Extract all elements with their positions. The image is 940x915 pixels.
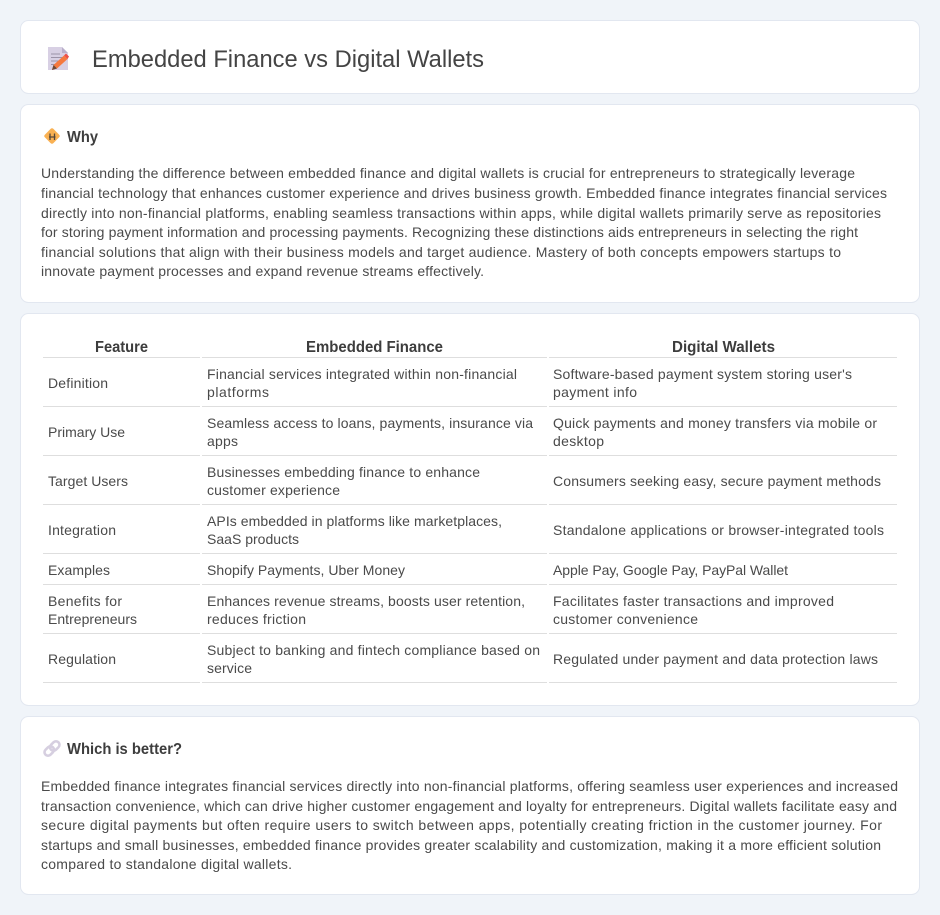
heading: why: Why bbox=[67, 129, 98, 146]
row: target users: Target Users bbox=[48, 473, 128, 489]
row: target users: Consumers seeking easy, secure payment methods bbox=[553, 473, 881, 489]
row: benefits for entrepreneurs: reduces friction bbox=[207, 611, 306, 627]
text block: which is better paragraph: secure digital payments but often require users to switch between apps, potentially creating friction in the customer journey. For bbox=[41, 817, 882, 833]
heading: which is better: Which is better? bbox=[67, 741, 182, 758]
table header row: Embedded Finance bbox=[306, 339, 443, 356]
text block: which is better paragraph: transaction convenience, which can drive higher customer engagement and loyalty for entrepreneurs. Digital wallets facilitate easy and bbox=[41, 798, 897, 814]
row: definition: Definition bbox=[48, 375, 108, 391]
row: integration: SaaS products bbox=[207, 531, 299, 547]
row: definition: platforms bbox=[207, 384, 269, 400]
row: benefits for entrepreneurs: Entrepreneurs bbox=[48, 611, 137, 627]
text block: why paragraph: innovate payment processes and expand revenue streams effectively. bbox=[41, 263, 484, 279]
row: regulation: Regulation bbox=[48, 651, 116, 667]
row: regulation: Subject to banking and fintech compliance based on bbox=[207, 642, 540, 658]
icon: orange diamond bbox=[44, 128, 60, 144]
table header row: Feature bbox=[95, 339, 148, 356]
text block: which is better paragraph bbox=[41, 778, 898, 872]
row: primary use: Seamless access to loans, payments, insurance via bbox=[207, 415, 533, 431]
text block: why paragraph: directly into non-financial platforms, enabling seamless transactions within apps, while digital wallets primarily serve as repositories bbox=[41, 205, 881, 221]
row: definition bbox=[48, 366, 852, 400]
row: benefits for entrepreneurs: Benefits for bbox=[48, 593, 122, 609]
row: primary use: Quick payments and money transfers via mobile or bbox=[553, 415, 877, 431]
row: target users bbox=[48, 464, 881, 498]
icon: document with pencil bbox=[48, 47, 69, 70]
row: examples: Apple Pay, Google Pay, PayPal Wallet bbox=[553, 562, 788, 578]
text block: why paragraph: financial solutions that align with their business models and target audience. Mastery of both concepts empowers startups to bbox=[41, 244, 841, 260]
text block: which is better paragraph: startups and small businesses, embedded finance provides greater scalability and customization, making it a more efficient solution bbox=[41, 837, 881, 853]
row: primary use: apps bbox=[207, 433, 238, 449]
row: primary use: desktop bbox=[553, 433, 604, 449]
row: integration: Standalone applications or browser-integrated tools bbox=[553, 522, 884, 538]
row: benefits for entrepreneurs: Enhances revenue streams, boosts user retention, bbox=[207, 593, 525, 609]
row: regulation bbox=[48, 642, 878, 676]
panel: why bbox=[20, 104, 920, 302]
row: definition: payment info bbox=[553, 384, 637, 400]
row: integration: APIs embedded in platforms like marketplaces, bbox=[207, 513, 502, 529]
text block: which is better paragraph: Embedded finance integrates financial services directly into non-financial platforms, offering seamless user experiences and increased bbox=[41, 778, 898, 794]
text block: which is better paragraph: compared to standalone digital wallets. bbox=[41, 856, 292, 872]
row: benefits for entrepreneurs: customer convenience bbox=[553, 611, 698, 627]
row: primary use: Primary Use bbox=[48, 424, 125, 440]
row: definition: Software-based payment system storing user's bbox=[553, 366, 852, 382]
row: benefits for entrepreneurs bbox=[48, 593, 834, 627]
text block: why paragraph bbox=[41, 165, 887, 279]
table header row: Digital Wallets bbox=[672, 339, 775, 356]
title: Embedded Finance vs Digital Wallets bbox=[92, 46, 484, 73]
row: integration: Integration bbox=[48, 522, 116, 538]
row: examples: Shopify Payments, Uber Money bbox=[207, 562, 405, 578]
panel: which is better bbox=[20, 716, 920, 894]
row: examples bbox=[48, 562, 788, 578]
row: regulation: service bbox=[207, 660, 252, 676]
text block: why paragraph: for storing payment information and processing payments. Recognizing these distinctions aids entrepreneurs in selecting the right bbox=[41, 224, 858, 240]
panel: comparison table bbox=[20, 314, 920, 706]
row: regulation: Regulated under payment and data protection laws bbox=[553, 651, 878, 667]
panel: title header bbox=[20, 20, 920, 94]
row: examples: Examples bbox=[48, 562, 110, 578]
row: benefits for entrepreneurs: Facilitates faster transactions and improved bbox=[553, 593, 834, 609]
table header row bbox=[95, 339, 775, 356]
row: target users: Businesses embedding finance to enhance bbox=[207, 464, 480, 480]
text block: why paragraph: Understanding the difference between embedded finance and digital wallets is crucial for entrepreneurs to strategically leverage bbox=[41, 165, 855, 181]
row: target users: customer experience bbox=[207, 482, 340, 498]
row: integration bbox=[48, 513, 884, 547]
icon: chain link bbox=[43, 740, 61, 757]
text block: why paragraph: financial technology that enhances customer experience and drives business growth. Embedded finance integrates financial services bbox=[41, 185, 887, 201]
row: primary use bbox=[48, 415, 877, 449]
row: definition: Financial services integrated within non-financial bbox=[207, 366, 517, 382]
